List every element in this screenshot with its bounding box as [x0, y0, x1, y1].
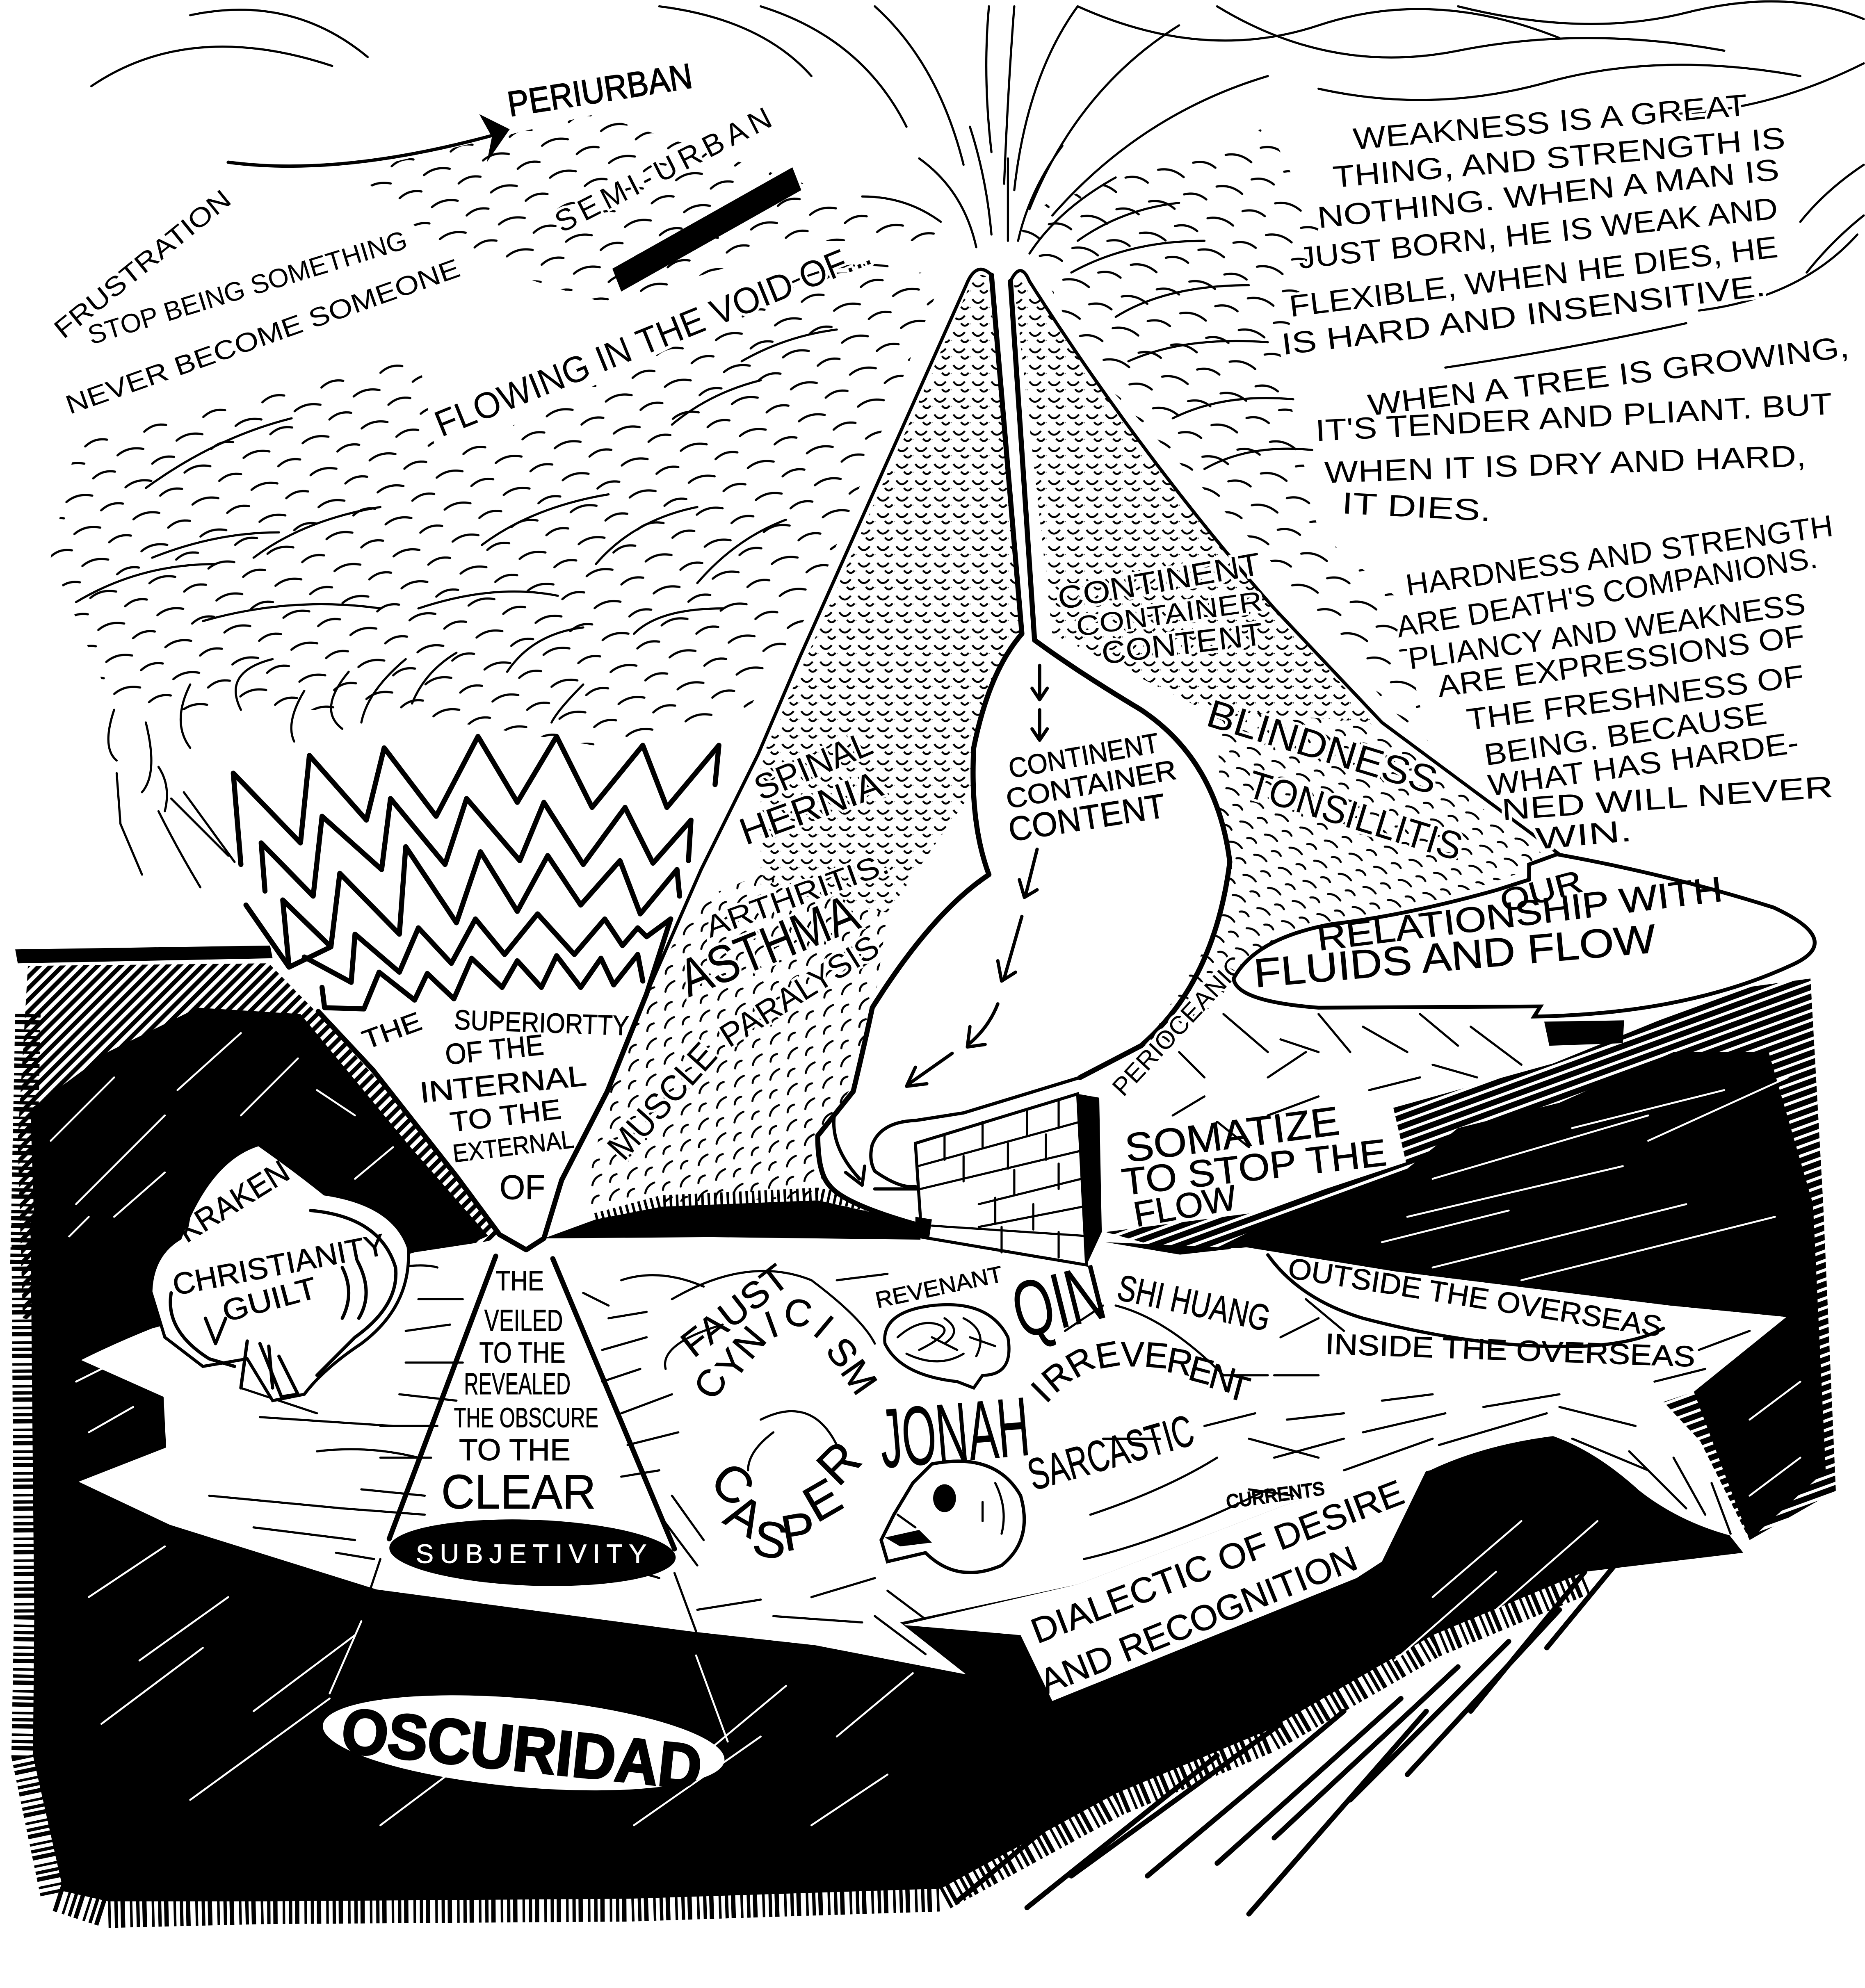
right text block: Lao Tzu passage: WHEN A TREE IS GROWING, [1366, 329, 1851, 422]
cone: veiled to revealed: VEILED [484, 1304, 563, 1338]
dialectic banner [903, 1470, 1426, 1702]
right text block: Lao Tzu passage: NOTHING. WHEN A MAN IS [1316, 153, 1781, 235]
right text block: Lao Tzu passage: IT'S TENDER AND PLIANT. BUT [1315, 387, 1833, 448]
kraken blob: CHRISTIANITY [170, 1227, 388, 1302]
cone: veiled to revealed [388, 1256, 677, 1591]
oscuridad label: OSCURIDAD [338, 1695, 705, 1803]
frustration text: NEVER BECOME SOMEONE [62, 253, 463, 420]
whale labels: CURRENTS [1225, 1477, 1326, 1512]
skull icon [881, 1461, 1024, 1573]
right text block: Lao Tzu passage: WEAKNESS IS A GREAT [1351, 88, 1749, 156]
cone: veiled to revealed: TO THE [459, 1433, 571, 1467]
dialectic banner: DIALECTIC OF DESIRE [1026, 1473, 1409, 1651]
somatize label: TO STOP THE [1119, 1131, 1389, 1204]
censored bar [612, 167, 801, 292]
mountain: BLINDNESS [1202, 691, 1443, 803]
funnel with zigzags: SUPERIORTTY [454, 1004, 630, 1042]
black sea upper right with hatching [1105, 978, 1836, 1540]
mountain: HERNIA [734, 762, 888, 853]
stomach with arrows: CONTAINER [1004, 754, 1179, 815]
mountain: MUSCLE [599, 1035, 725, 1167]
whale labels: FAUST [673, 1256, 796, 1365]
right text block: Lao Tzu passage: WIN. [1534, 814, 1633, 856]
fish: our relationship with fluids and flow: RELATIONSHIP WITH [1315, 870, 1725, 958]
frustration text: STOP BEING SOMETHING [84, 225, 411, 350]
funnel with zigzags: OF THE [443, 1029, 546, 1071]
upper flowing water field [51, 1, 1864, 887]
funnel with zigzags: EXTERNAL [451, 1125, 575, 1168]
fish: our relationship with fluids and flow: FLUIDS AND FLOW [1252, 916, 1658, 996]
right text block: Lao Tzu passage: IS HARD AND INSENSITIVE. [1280, 268, 1767, 361]
mountain: ARTHRITIS. [701, 846, 893, 944]
whale body [79, 1238, 1786, 1674]
right text block: Lao Tzu passage: IT DIES. [1341, 486, 1492, 528]
whale labels: CASPER [700, 1430, 872, 1571]
right text block: Lao Tzu passage: ARE DEATH'S COMPANIONS. [1394, 540, 1819, 644]
frustration text [48, 184, 463, 420]
right text block: Lao Tzu passage: JUST BORN, HE IS WEAK AND [1297, 191, 1779, 275]
whale labels: INSIDE THE OVERSEAS [1325, 1328, 1696, 1373]
dialectic banner: AND RECOGNITION [1034, 1539, 1363, 1702]
right text block: Lao Tzu passage: FLEXIBLE, WHEN HE DIES, HE [1287, 230, 1780, 324]
funnel text: THE [358, 1006, 426, 1055]
oscuridad label [319, 1621, 728, 1805]
whale labels: JONAH [876, 1379, 1033, 1486]
mountain [544, 268, 1559, 1240]
stomach with arrows [818, 275, 1230, 1226]
whale labels: SHI HUANG [1114, 1267, 1274, 1339]
funnel with zigzags [233, 736, 719, 1250]
somatize label [1119, 1098, 1389, 1235]
somatize label: FLOW [1130, 1178, 1240, 1235]
kraken blob [151, 1144, 409, 1401]
right text block: Lao Tzu passage: NED WILL NEVER [1500, 770, 1834, 827]
mountain: ASTHMA [670, 882, 867, 1008]
whale labels: REVENANT [873, 1261, 1005, 1313]
right text block: Lao Tzu passage: HARDNESS AND STRENGTH [1404, 508, 1835, 602]
whale labels: IRREVERENT [1024, 1334, 1254, 1410]
cone: veiled to revealed: THE OBSCURE [454, 1402, 598, 1434]
right text block: Lao Tzu passage: THE FRESHNESS OF [1465, 659, 1806, 736]
frustration text: FRUSTRATION [48, 184, 237, 344]
funnel with zigzags: OF [500, 1168, 545, 1206]
censored block [1544, 1020, 1624, 1046]
whale labels: OUTSIDE THE OVERSEAS [1286, 1252, 1664, 1343]
whale labels: CYNICISM [685, 1289, 886, 1406]
mountain: CONTAINER [1074, 586, 1265, 643]
whale labels [673, 1247, 1696, 1571]
cone: veiled to revealed: TO THE [479, 1337, 566, 1369]
mountain: TONSILLITIS [1242, 762, 1468, 869]
flowing in the void text: FLOWING IN THE VOID OF... [429, 232, 877, 445]
right text block: Lao Tzu passage [1280, 88, 1851, 856]
somatize label: SOMATIZE [1122, 1098, 1342, 1171]
cone text: THE [496, 1265, 544, 1297]
semi-urban label: SEMI-URBAN [549, 100, 777, 239]
right text block: Lao Tzu passage: ARE EXPRESSIONS OF [1435, 618, 1806, 704]
kraken blob: GUILT [219, 1270, 320, 1328]
mountain: SPINAL [749, 723, 878, 808]
whale labels: SARCASTIC [1022, 1405, 1199, 1500]
right text block: Lao Tzu passage: PLIANCY AND WEAKNESS [1406, 586, 1808, 676]
right text block: Lao Tzu passage: WHEN IT IS DRY AND HARD, [1324, 439, 1807, 490]
funnel with zigzags: INTERNAL [418, 1060, 588, 1109]
black sea lower with fringe [28, 1217, 1743, 1914]
cone: veiled to revealed: CLEAR [441, 1465, 596, 1518]
periurban label: PERIURBAN [505, 56, 695, 124]
right text block: Lao Tzu passage: BEING. BECAUSE [1482, 696, 1769, 772]
cone: veiled to revealed: REVEALED [464, 1367, 571, 1401]
perioceanic label: PERIOCEANIC [1107, 951, 1250, 1101]
cone: veiled to revealed: SUBJETIVITY [416, 1539, 646, 1569]
right text block: Lao Tzu passage: WHAT HAS HARDE- [1486, 725, 1801, 802]
kraken text: KRAKEN [171, 1154, 295, 1249]
funnel with zigzags: TO THE [448, 1094, 563, 1138]
mountain labels: CONTINENT [1055, 546, 1263, 617]
stomach with arrows: CONTENT [1006, 786, 1168, 849]
mountain: PARALYSIS [713, 928, 886, 1055]
whale labels: QIN [1003, 1247, 1113, 1355]
subjectivity ellipse [388, 1515, 677, 1591]
fish: our relationship with fluids and flow: OUR [1496, 864, 1586, 919]
fish: our relationship with fluids and flow [1234, 854, 1815, 1017]
brick wall [915, 1094, 1102, 1265]
right text block: Lao Tzu passage: THING, AND STRENGTH IS [1331, 121, 1787, 194]
mountain: CONTENT [1100, 616, 1265, 671]
black sea upper left with hatched edges [15, 946, 500, 1344]
brain icon [885, 1305, 1009, 1388]
stomach text: CONTINENT [1006, 727, 1161, 784]
